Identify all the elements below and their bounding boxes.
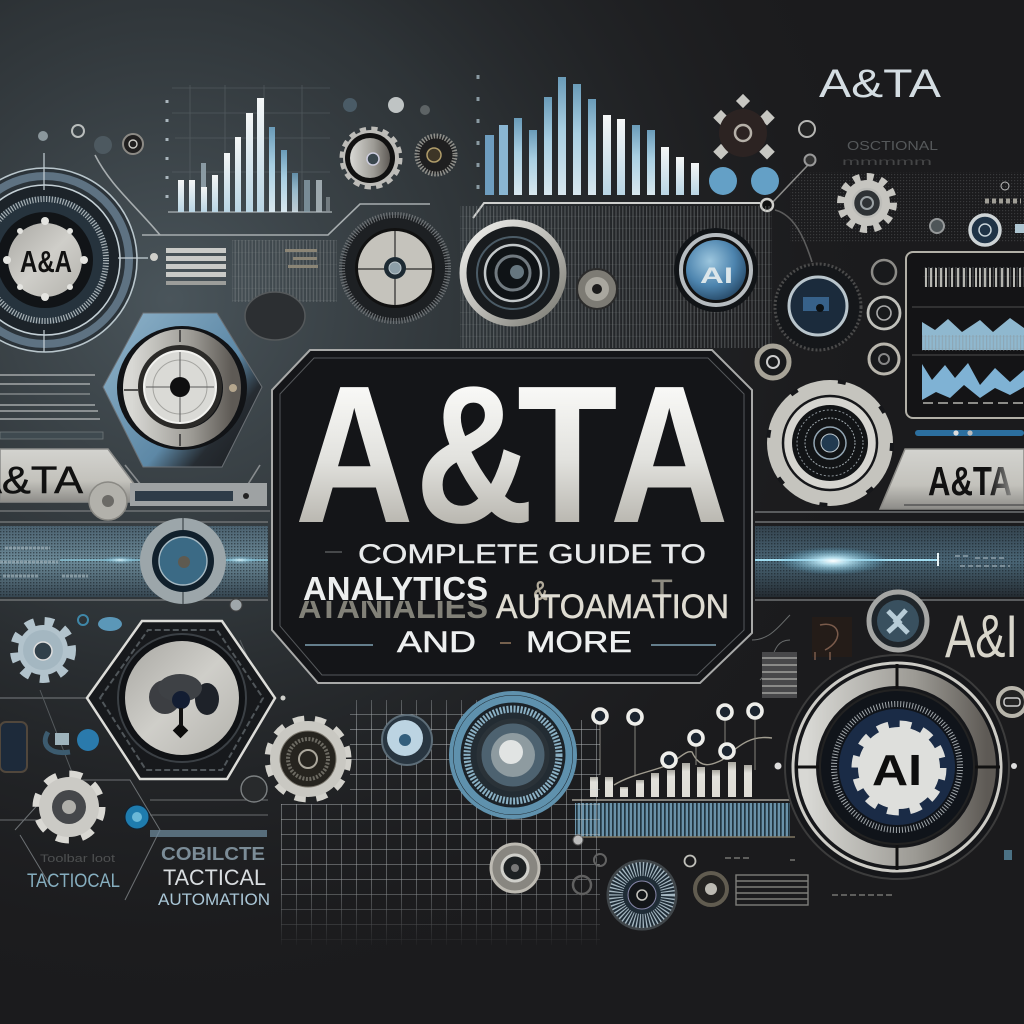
faint label: top right: mmmmm	[842, 157, 932, 168]
icon: blue AI ball	[674, 228, 758, 312]
icon: small silver knob	[577, 269, 617, 309]
node line chart	[590, 704, 772, 797]
circuit traces	[0, 155, 1024, 900]
gauge: lower centre chrome	[491, 844, 539, 892]
dotted panel: upper right	[790, 172, 1024, 242]
bar chart: left	[167, 85, 332, 212]
mesh panel: top centre	[460, 206, 772, 348]
label stack: tactical automation: TACTICAL	[163, 865, 266, 890]
label: TACTIOCAL: TACTIOCAL	[27, 871, 120, 892]
icon: blue screen lens	[775, 264, 861, 350]
wave panel	[906, 252, 1024, 418]
plate: A&TA left	[0, 449, 135, 502]
label stack: tactical automation: COBILCTE	[161, 844, 265, 864]
gauge: chrome lens	[463, 223, 563, 323]
icon: silver knob left	[89, 482, 127, 520]
gauge: blue ring centre	[451, 693, 575, 817]
gauge: large left ring with A&A	[0, 153, 158, 352]
striped blue bar	[573, 803, 795, 845]
gauge: band ring left	[140, 518, 226, 604]
icon: arrow ring right	[869, 592, 927, 650]
gear: top centre lens	[343, 130, 399, 186]
icon: dotted dial	[417, 136, 455, 174]
hexagon dial panel	[87, 621, 275, 779]
small icons: top left	[38, 97, 430, 154]
mesh band: left	[0, 526, 268, 597]
control strip: left	[130, 483, 267, 506]
dial: striped blue lower right	[608, 861, 676, 929]
mesh band with light flare: right	[755, 526, 1024, 597]
subtitle line three: more: MORE	[526, 626, 632, 659]
small rings: right column	[757, 260, 900, 378]
faint label: top right	[842, 138, 938, 168]
title panel	[272, 345, 752, 683]
icon: small pin left	[230, 599, 242, 611]
subtitle line one: COMPLETE GUIDE TO	[358, 539, 706, 569]
stray ampersand: &	[533, 575, 548, 606]
blue status bar	[915, 430, 1024, 436]
label stack: tactical automation	[158, 844, 270, 909]
lower right details	[573, 850, 1012, 895]
gear: silver lower left	[39, 777, 99, 837]
striped panel: top left	[166, 240, 337, 340]
gauge: large AI gear: AI	[872, 746, 922, 795]
gauge: large AI gear	[774, 655, 1017, 879]
subtitle line three: and: AND	[397, 626, 476, 659]
icon: top hub with blue dots	[709, 94, 816, 211]
gauge: large left ring with A&A: A&A	[20, 244, 72, 279]
gear: light blue top left of hexagon	[18, 625, 68, 675]
circuit box: right	[762, 617, 852, 698]
stray T: T	[651, 573, 673, 611]
icon: blue ball lower left	[125, 805, 149, 829]
icon: small light-blue ball	[382, 715, 432, 765]
striped box: lower right	[736, 875, 808, 905]
subtitle line two: automation: AUTOAMATION	[496, 588, 729, 626]
stripes: mid left	[0, 375, 103, 439]
small icons: upper right	[930, 182, 1024, 245]
striped strip: lower left	[150, 830, 267, 837]
accent rules	[305, 552, 716, 645]
gauge: mid left lens	[103, 313, 262, 467]
gear: upper right	[844, 180, 890, 226]
title: A&TA	[295, 345, 729, 564]
gauge: silver quadrant dial	[342, 215, 448, 321]
top right title: A&TA	[819, 62, 941, 106]
icon: right edge knob	[998, 688, 1024, 716]
bar chart: blue top	[478, 75, 699, 200]
gear: silver centre bottom	[270, 721, 346, 797]
icon: blue AI ball: AI	[700, 263, 733, 288]
small icons: left of hexagon	[0, 615, 286, 802]
plate: A&TA right	[880, 449, 1024, 509]
icon: knob lower right	[695, 873, 727, 905]
faint label: top right: OSCTIONAL	[847, 138, 938, 153]
ghost subtitle text: ATANIALIES	[298, 589, 488, 625]
faint scribble label: Toolbar loot	[40, 853, 115, 865]
gear: silver lens right	[767, 380, 893, 506]
label stack: tactical automation: AUTOMATION	[158, 890, 270, 909]
grid	[281, 700, 600, 945]
subtitle line two: analytics: ANALYTICS	[303, 570, 488, 607]
